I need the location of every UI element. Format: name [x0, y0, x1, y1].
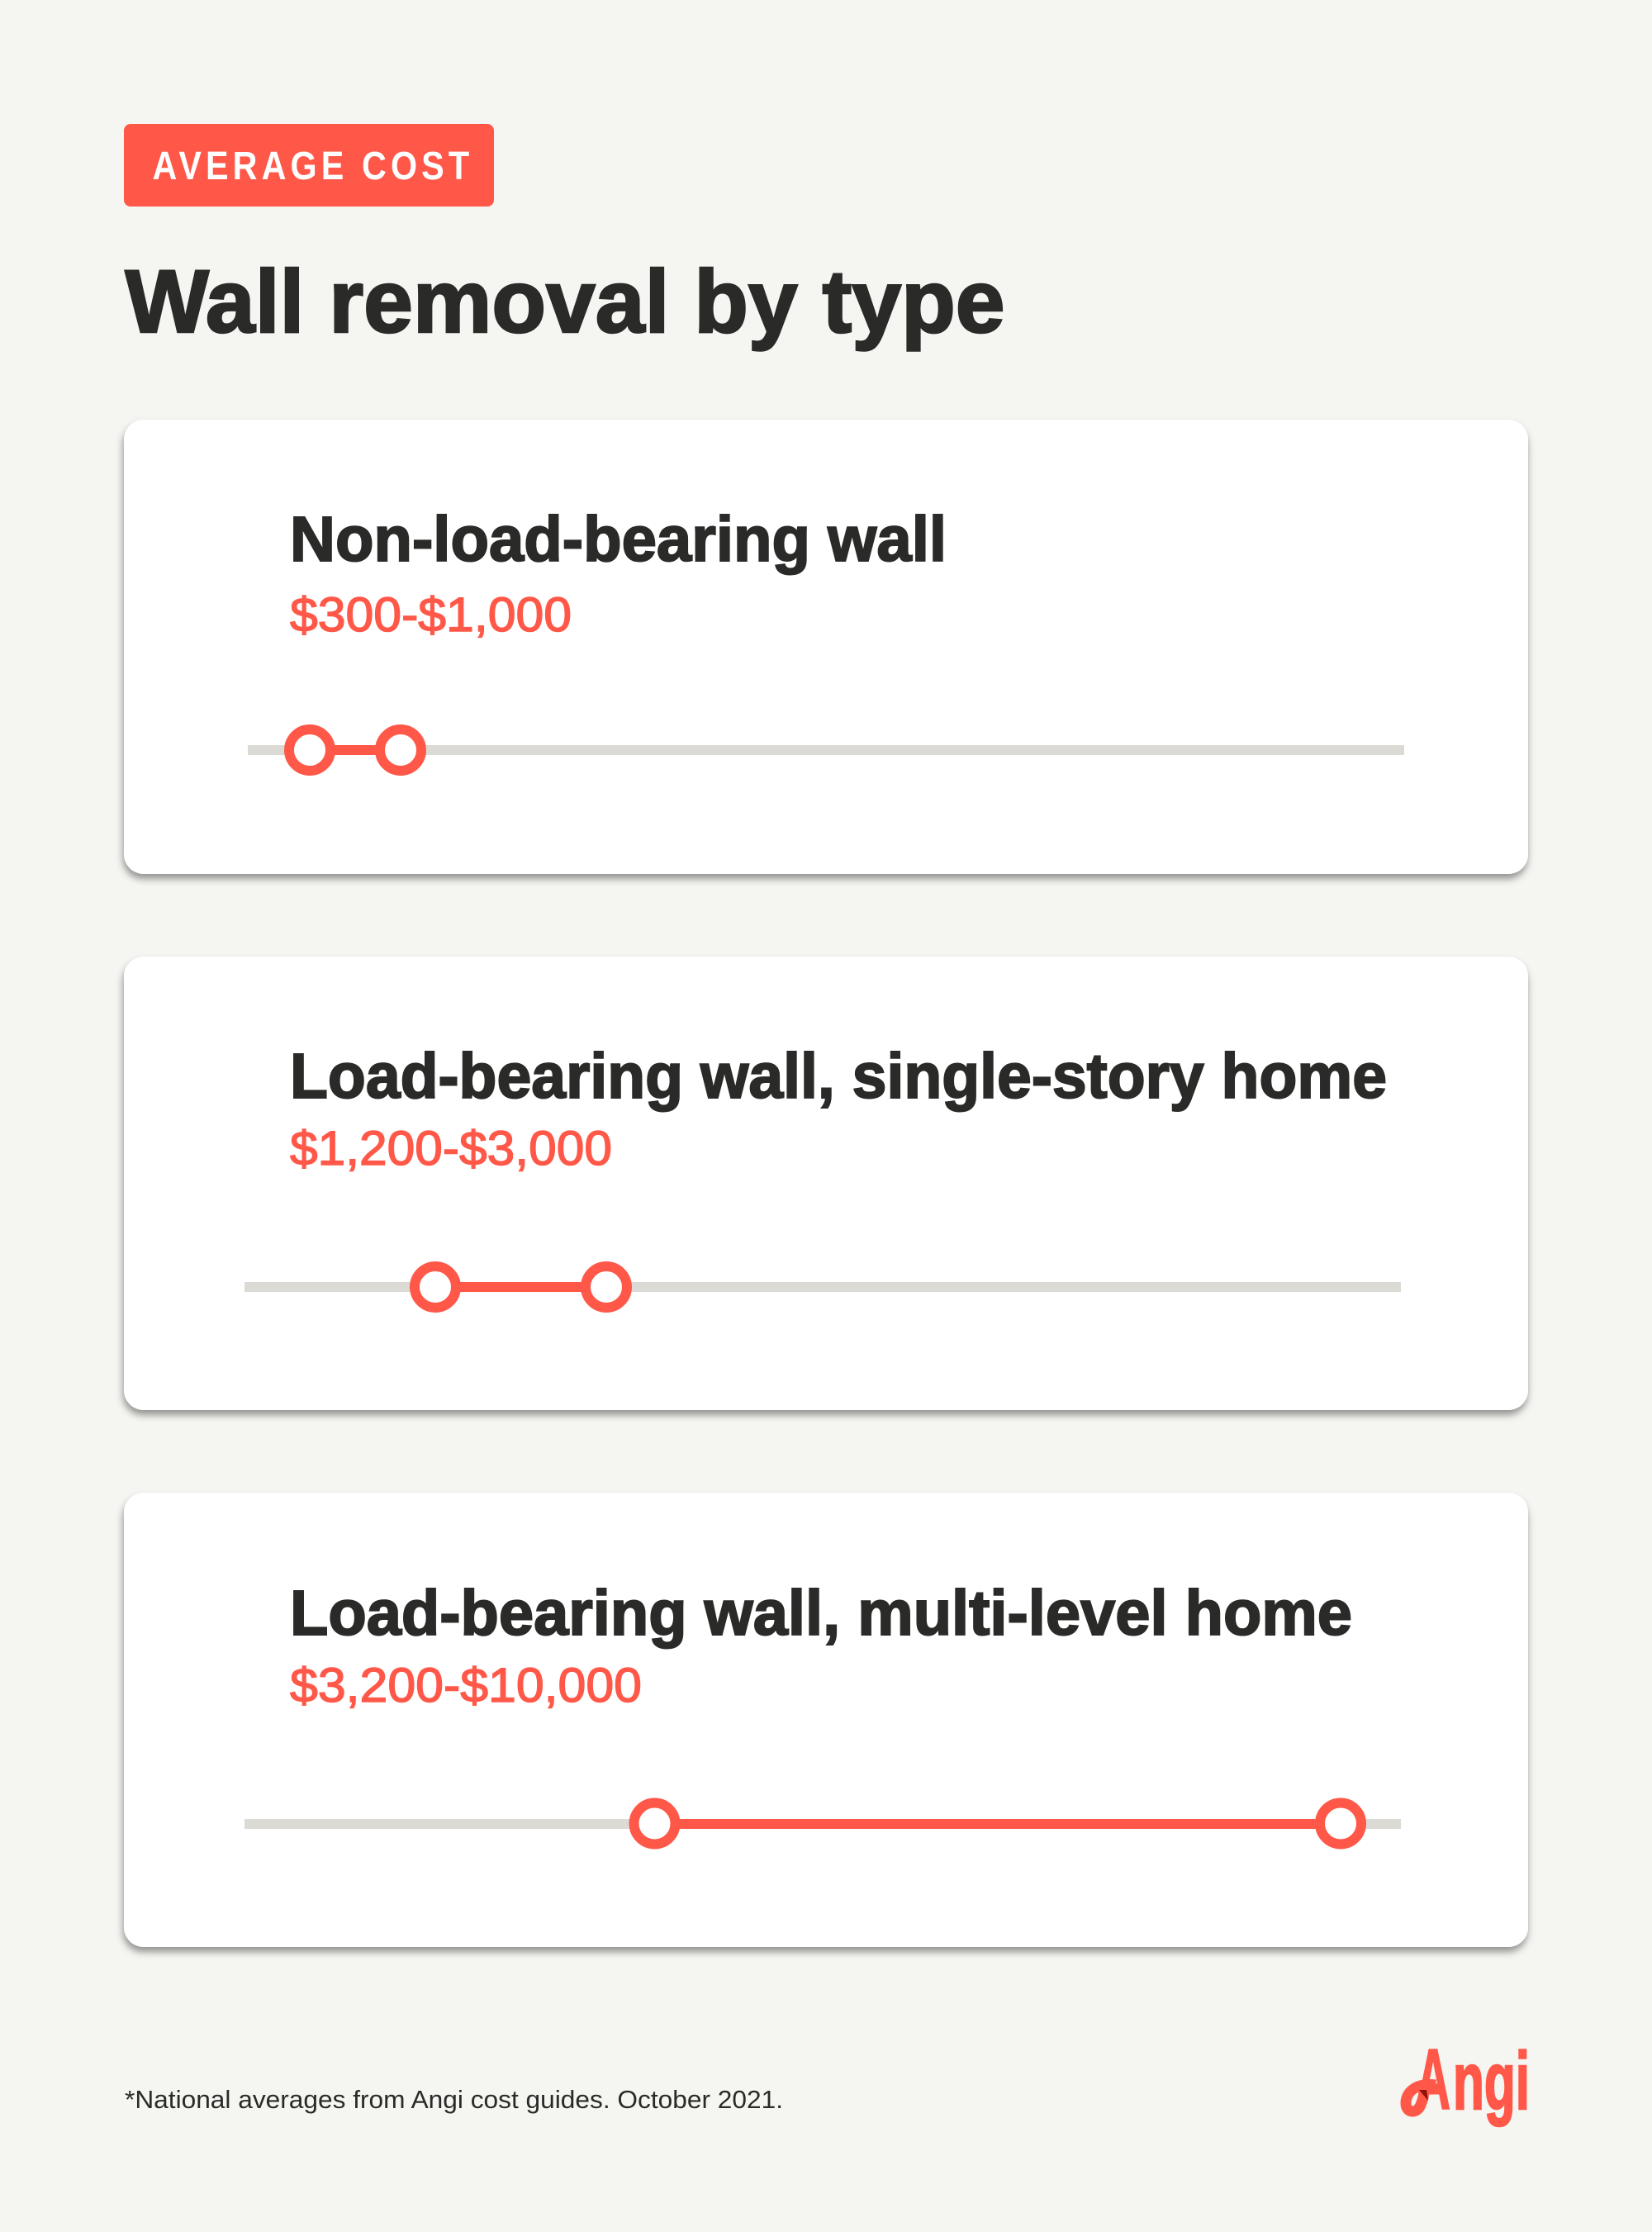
tag: average cost: AVERAGE COST [152, 144, 469, 188]
panel: non-load-bearing wall [124, 420, 1528, 874]
tag: average cost [124, 124, 494, 207]
range slider [244, 1802, 1401, 1844]
range slider [248, 729, 1404, 771]
footnote: *National averages from Angi cost guides. October 2021. [125, 2085, 783, 2114]
heading: single-story home: Load-bearing wall, single-story home [290, 1041, 1387, 1112]
logo: Angi: A [1416, 2032, 1450, 2128]
price range: $300-$1,000 [290, 588, 572, 642]
panel: load-bearing wall, single-story home [124, 957, 1528, 1410]
range slider [244, 1266, 1401, 1308]
panel: load-bearing wall, multi-level home [124, 1493, 1528, 1947]
logo: Angi [1406, 2032, 1530, 2128]
logo: Angi: ngi [1453, 2035, 1530, 2126]
heading: multi-level home: Load-bearing wall, multi-level home [290, 1578, 1352, 1649]
heading: non-load-bearing wall: Non-load-bearing wall [290, 504, 947, 575]
price range: $1,200-$3,000 [290, 1122, 612, 1175]
price range: $3,200-$10,000 [290, 1659, 642, 1712]
title: Wall removal by type [126, 251, 1004, 351]
